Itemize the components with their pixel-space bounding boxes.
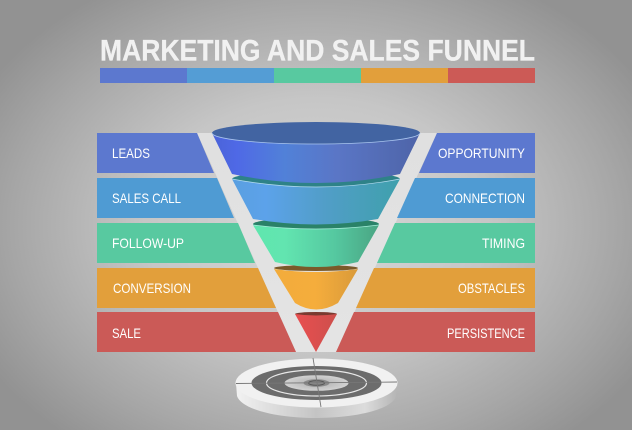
bar: timing [377,223,535,263]
title: MARKETING AND SALES FUNNEL [100,34,535,68]
bar: leads: LEADS [112,145,150,161]
bar: sale: SALE [112,325,141,341]
funnel tier 3: green [253,218,379,267]
bar: conversion [97,268,276,308]
funnel tier 5: red [295,312,337,352]
left bars [97,133,296,352]
bar: opportunity [419,133,535,173]
funnel tier 1: indigo [212,122,420,183]
target crosshair [236,358,397,407]
target [236,358,398,418]
bar: sale [97,312,296,352]
V channel behind funnel [197,133,437,352]
target top disc [236,358,398,408]
bar: connection [397,178,535,218]
bar: persistence [336,312,535,352]
bar: leads [97,133,214,173]
colour legend strip [100,68,535,83]
bar: obstacles [356,268,535,308]
bar: follow-up [97,223,255,263]
right bars [336,133,535,352]
bar: opportunity: OPPORTUNITY [438,145,526,161]
bar: sales call: SALES CALL [112,190,181,206]
bar: persistence: PERSISTENCE [447,325,525,341]
funnel tier 4: orange [274,265,358,310]
bar: obstacles: OBSTACLES [458,280,525,296]
target rings [252,366,382,400]
funnel [212,122,420,352]
bar: conversion: CONVERSION [113,280,191,296]
bar: timing: TIMING [482,235,525,251]
bar: follow-up: FOLLOW-UP [112,235,184,251]
target base side [236,383,397,418]
bar: connection: CONNECTION [445,190,525,206]
funnel tier 2: blue [232,171,400,224]
bar: sales call [97,178,234,218]
